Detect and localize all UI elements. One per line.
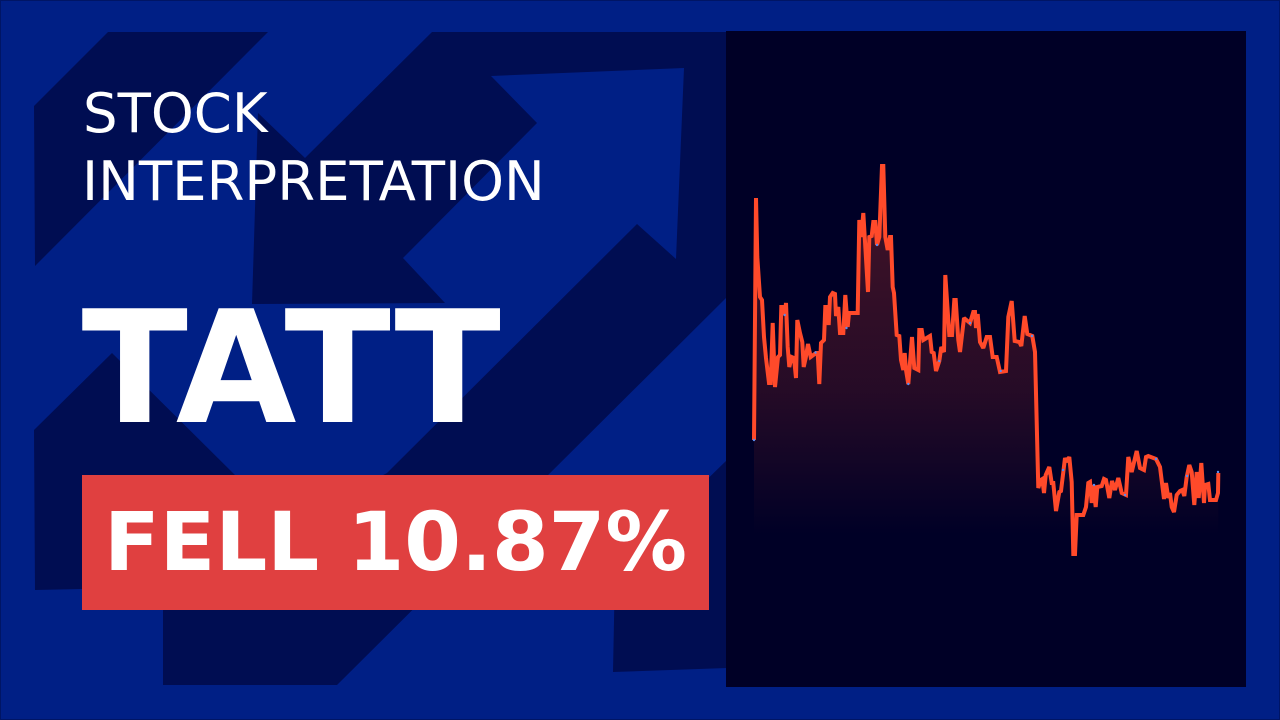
heading: stock interpretation: [82, 81, 545, 213]
heading: stock interpretation: INTERPRETATION: [82, 149, 545, 213]
chart price line: [754, 166, 1218, 554]
heading: stock interpretation: STOCK: [83, 81, 269, 145]
badge: fell 10.87%: [82, 475, 709, 610]
badge: fell 10.87%: FELL 10.87%: [104, 495, 687, 590]
chart panel: [726, 31, 1246, 687]
chart data markers: [753, 244, 1219, 496]
background arrow shapes: [34, 32, 727, 685]
chart area fill: [754, 166, 1218, 554]
ticker: TATT: TATT: [82, 277, 501, 459]
